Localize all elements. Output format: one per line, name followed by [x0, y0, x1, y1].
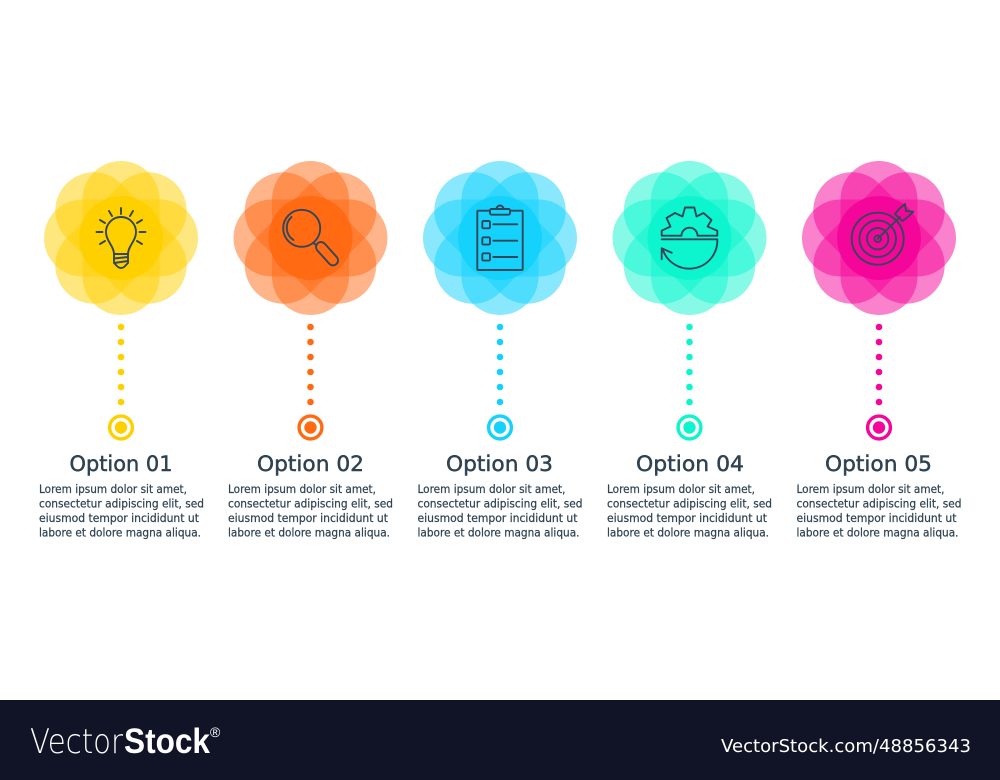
heading: Option 01: [70, 452, 172, 476]
panel: option 01: [39, 156, 204, 540]
icon: clipboard checklist: [477, 206, 523, 270]
body text: labore et dolore magna aliqua.: [607, 526, 769, 540]
body text: [418, 482, 582, 540]
body text: consectetur adipiscing elit, sed: [228, 496, 393, 510]
body text: [607, 482, 772, 540]
ring marker: [489, 416, 511, 439]
dotted connector: [307, 324, 314, 405]
footer url: VectorStock.com/48856343: [721, 736, 971, 757]
dotted connector: [686, 324, 693, 405]
flower: teal: [608, 156, 771, 320]
body text: consectetur adipiscing elit, sed: [418, 496, 582, 510]
body text: Lorem ipsum dolor sit amet,: [228, 482, 376, 496]
footer logo: Stock: [124, 722, 210, 761]
ring marker: [299, 416, 322, 439]
body text: eiusmod tempor incididunt ut: [228, 511, 388, 525]
body text: Lorem ipsum dolor sit amet,: [796, 482, 944, 496]
footer logo: [30, 722, 221, 762]
heading: Option 04: [636, 452, 744, 476]
footer bar: [0, 700, 1000, 780]
body text: [39, 482, 204, 540]
dotted connector: [497, 324, 503, 405]
body text: eiusmod tempor incididunt ut: [39, 511, 199, 525]
flower: orange: [229, 156, 392, 320]
body text: labore et dolore magna aliqua.: [418, 526, 580, 540]
body text: eiusmod tempor incididunt ut: [796, 511, 957, 525]
footer logo: ®: [210, 724, 221, 740]
ring marker: [868, 416, 890, 439]
body text: eiusmod tempor incididunt ut: [418, 511, 578, 525]
body text: labore et dolore magna aliqua.: [228, 526, 390, 540]
icon: light bulb: [96, 208, 146, 268]
body text: consectetur adipiscing elit, sed: [796, 496, 962, 510]
icon: gear with rotation arrow: [662, 208, 717, 269]
body text: consectetur adipiscing elit, sed: [607, 496, 772, 510]
panel: option 03: [418, 156, 582, 540]
panel: option 04: [607, 156, 772, 540]
body text: [228, 482, 393, 540]
icon: target with arrow: [852, 204, 913, 265]
dotted connector: [118, 324, 124, 405]
flower: magenta: [797, 156, 961, 320]
body text: Lorem ipsum dolor sit amet,: [418, 482, 566, 496]
ring marker: [110, 416, 132, 439]
body text: Lorem ipsum dolor sit amet,: [607, 482, 755, 496]
body text: Lorem ipsum dolor sit amet,: [39, 482, 187, 496]
panel: option 02: [228, 156, 393, 540]
body text: labore et dolore magna aliqua.: [39, 526, 201, 540]
body text: labore et dolore magna aliqua.: [796, 526, 958, 540]
flower: yellow: [39, 156, 203, 320]
body text: consectetur adipiscing elit, sed: [39, 496, 204, 510]
footer logo: Vector: [30, 722, 123, 762]
heading: Option 03: [446, 452, 553, 476]
panel: option 05: [796, 156, 962, 540]
ring marker: [678, 416, 701, 439]
icon: magnifying glass: [283, 210, 340, 267]
body text: [796, 482, 962, 540]
body text: eiusmod tempor incididunt ut: [607, 511, 768, 525]
heading: Option 02: [257, 452, 364, 476]
dotted connector: [876, 324, 882, 405]
flower: blue: [418, 156, 582, 320]
heading: Option 05: [825, 452, 932, 476]
